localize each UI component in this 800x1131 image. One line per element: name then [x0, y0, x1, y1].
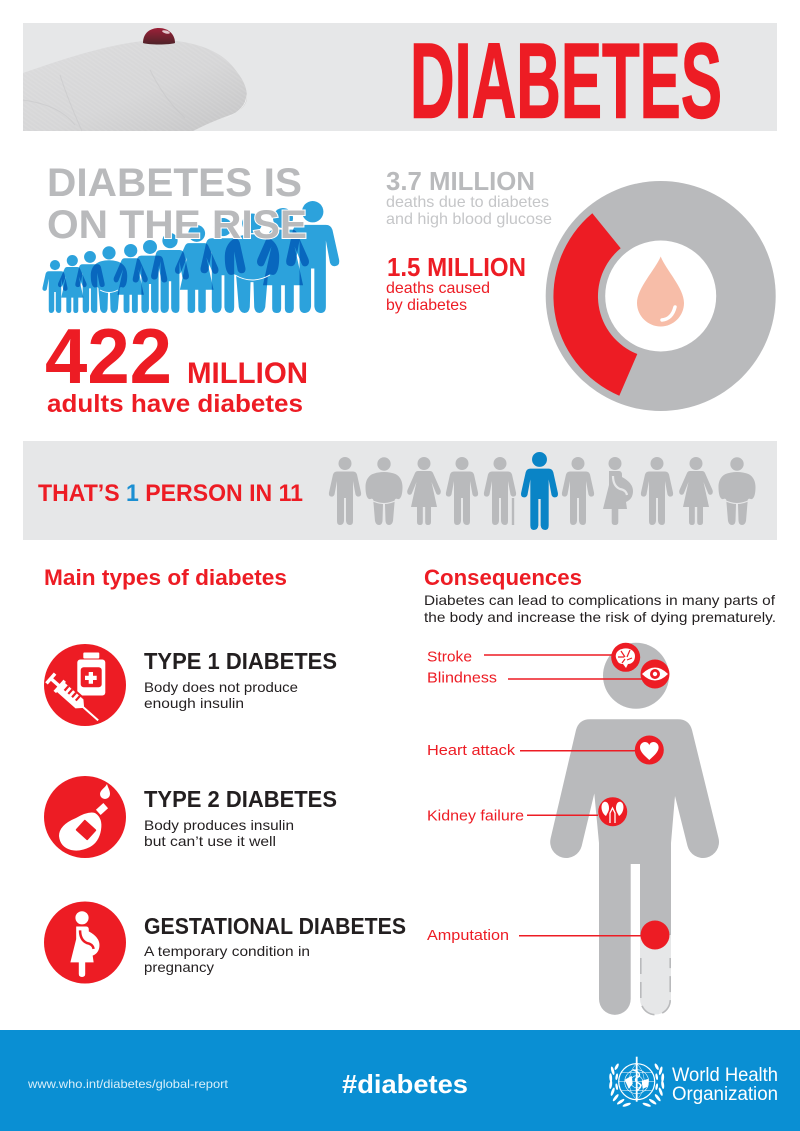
text: type 2 diabetes: Body produces insulin [144, 817, 294, 833]
text: type 1 diabetes: Body does not produce [144, 679, 298, 695]
stat: 422 million adults: MILLION [187, 357, 308, 390]
labels: Blindness [427, 670, 497, 686]
heading: diabetes is on the rise [47, 161, 307, 247]
heading: main types of diabetes: Main types of diabetes [44, 565, 287, 590]
text: gestational diabetes: pregnancy [144, 959, 214, 975]
heading: diabetes is on the rise: DIABETES IS [47, 161, 302, 205]
text: consequences description: the body and increase the risk of dying prematurely. [424, 609, 776, 625]
band: one person in eleven [23, 441, 777, 540]
crowd of blue figures [30, 170, 350, 320]
heading: consequences: Consequences [424, 565, 582, 590]
hashtag: #diabetes [342, 1069, 468, 1099]
text: type 1 diabetes: TYPE 1 DIABETES [144, 648, 337, 674]
text: type 2 diabetes: TYPE 2 DIABETES [144, 786, 337, 812]
icon: glucose meter [44, 776, 126, 858]
image: finger with blood drop [23, 28, 247, 131]
body diagram [427, 643, 719, 1015]
WHO name [672, 1065, 778, 1105]
text: consequences description: Diabetes can lead to complications in many parts of [424, 592, 775, 608]
labels [427, 648, 524, 944]
WHO name: Organization [672, 1084, 778, 1105]
stat: 3.7 million deaths [386, 166, 552, 228]
stat: 422 million adults: 422 [45, 312, 172, 400]
marker: amputation [640, 920, 670, 950]
row of eleven figures [329, 452, 756, 530]
text: type 2 diabetes: but can’t use it well [144, 833, 276, 849]
text: type 1 diabetes [144, 648, 337, 711]
text: gestational diabetes: GESTATIONAL DIABETES [144, 913, 406, 939]
icon: pregnant woman [44, 902, 126, 984]
text: gestational diabetes [144, 913, 406, 975]
labels: Amputation [427, 927, 509, 944]
icon: heart [635, 736, 664, 764]
labels: Kidney failure [427, 808, 524, 824]
donut chart with blood drop [546, 181, 776, 411]
leader lines [484, 655, 642, 936]
stat: 1.5 million deaths: 1.5 MILLION [387, 252, 526, 282]
text: type 1 diabetes: enough insulin [144, 695, 244, 711]
text: that's 1 person in 11: THAT’S 1 PERSON IN 11 [38, 480, 303, 507]
stat: 1.5 million deaths [386, 252, 526, 314]
icon: kidneys [598, 797, 627, 826]
header banner [23, 20, 777, 140]
heading: diabetes is on the rise: ON THE RISE [47, 203, 307, 247]
stat: 3.7 million deaths: 3.7 MILLION [386, 166, 535, 196]
stat: 422 million adults [45, 312, 308, 418]
labels: Stroke [427, 648, 472, 666]
stat: 1.5 million deaths: deaths caused [386, 280, 490, 297]
WHO logo [609, 1057, 665, 1108]
stat: 422 million adults: adults have diabetes [47, 390, 303, 418]
text: gestational diabetes: A temporary condition in [144, 943, 310, 959]
stat: 3.7 million deaths: deaths due to diabetes [386, 194, 549, 211]
text: consequences description [424, 592, 776, 625]
text: type 2 diabetes [144, 786, 337, 849]
labels: Heart attack [427, 742, 516, 759]
amputated lower leg [640, 935, 671, 1015]
footer [0, 1030, 800, 1131]
icon: eye [640, 660, 670, 688]
stat: 1.5 million deaths: by diabetes [386, 297, 467, 314]
icon: brain [611, 643, 640, 672]
stat: 3.7 million deaths: and high blood glucose [386, 211, 552, 228]
footer url: www.who.int/diabetes/global-report [27, 1077, 229, 1091]
WHO name: World Health [672, 1065, 778, 1086]
icon: bottle and syringe [44, 644, 126, 726]
figure: head and body [550, 643, 719, 1015]
